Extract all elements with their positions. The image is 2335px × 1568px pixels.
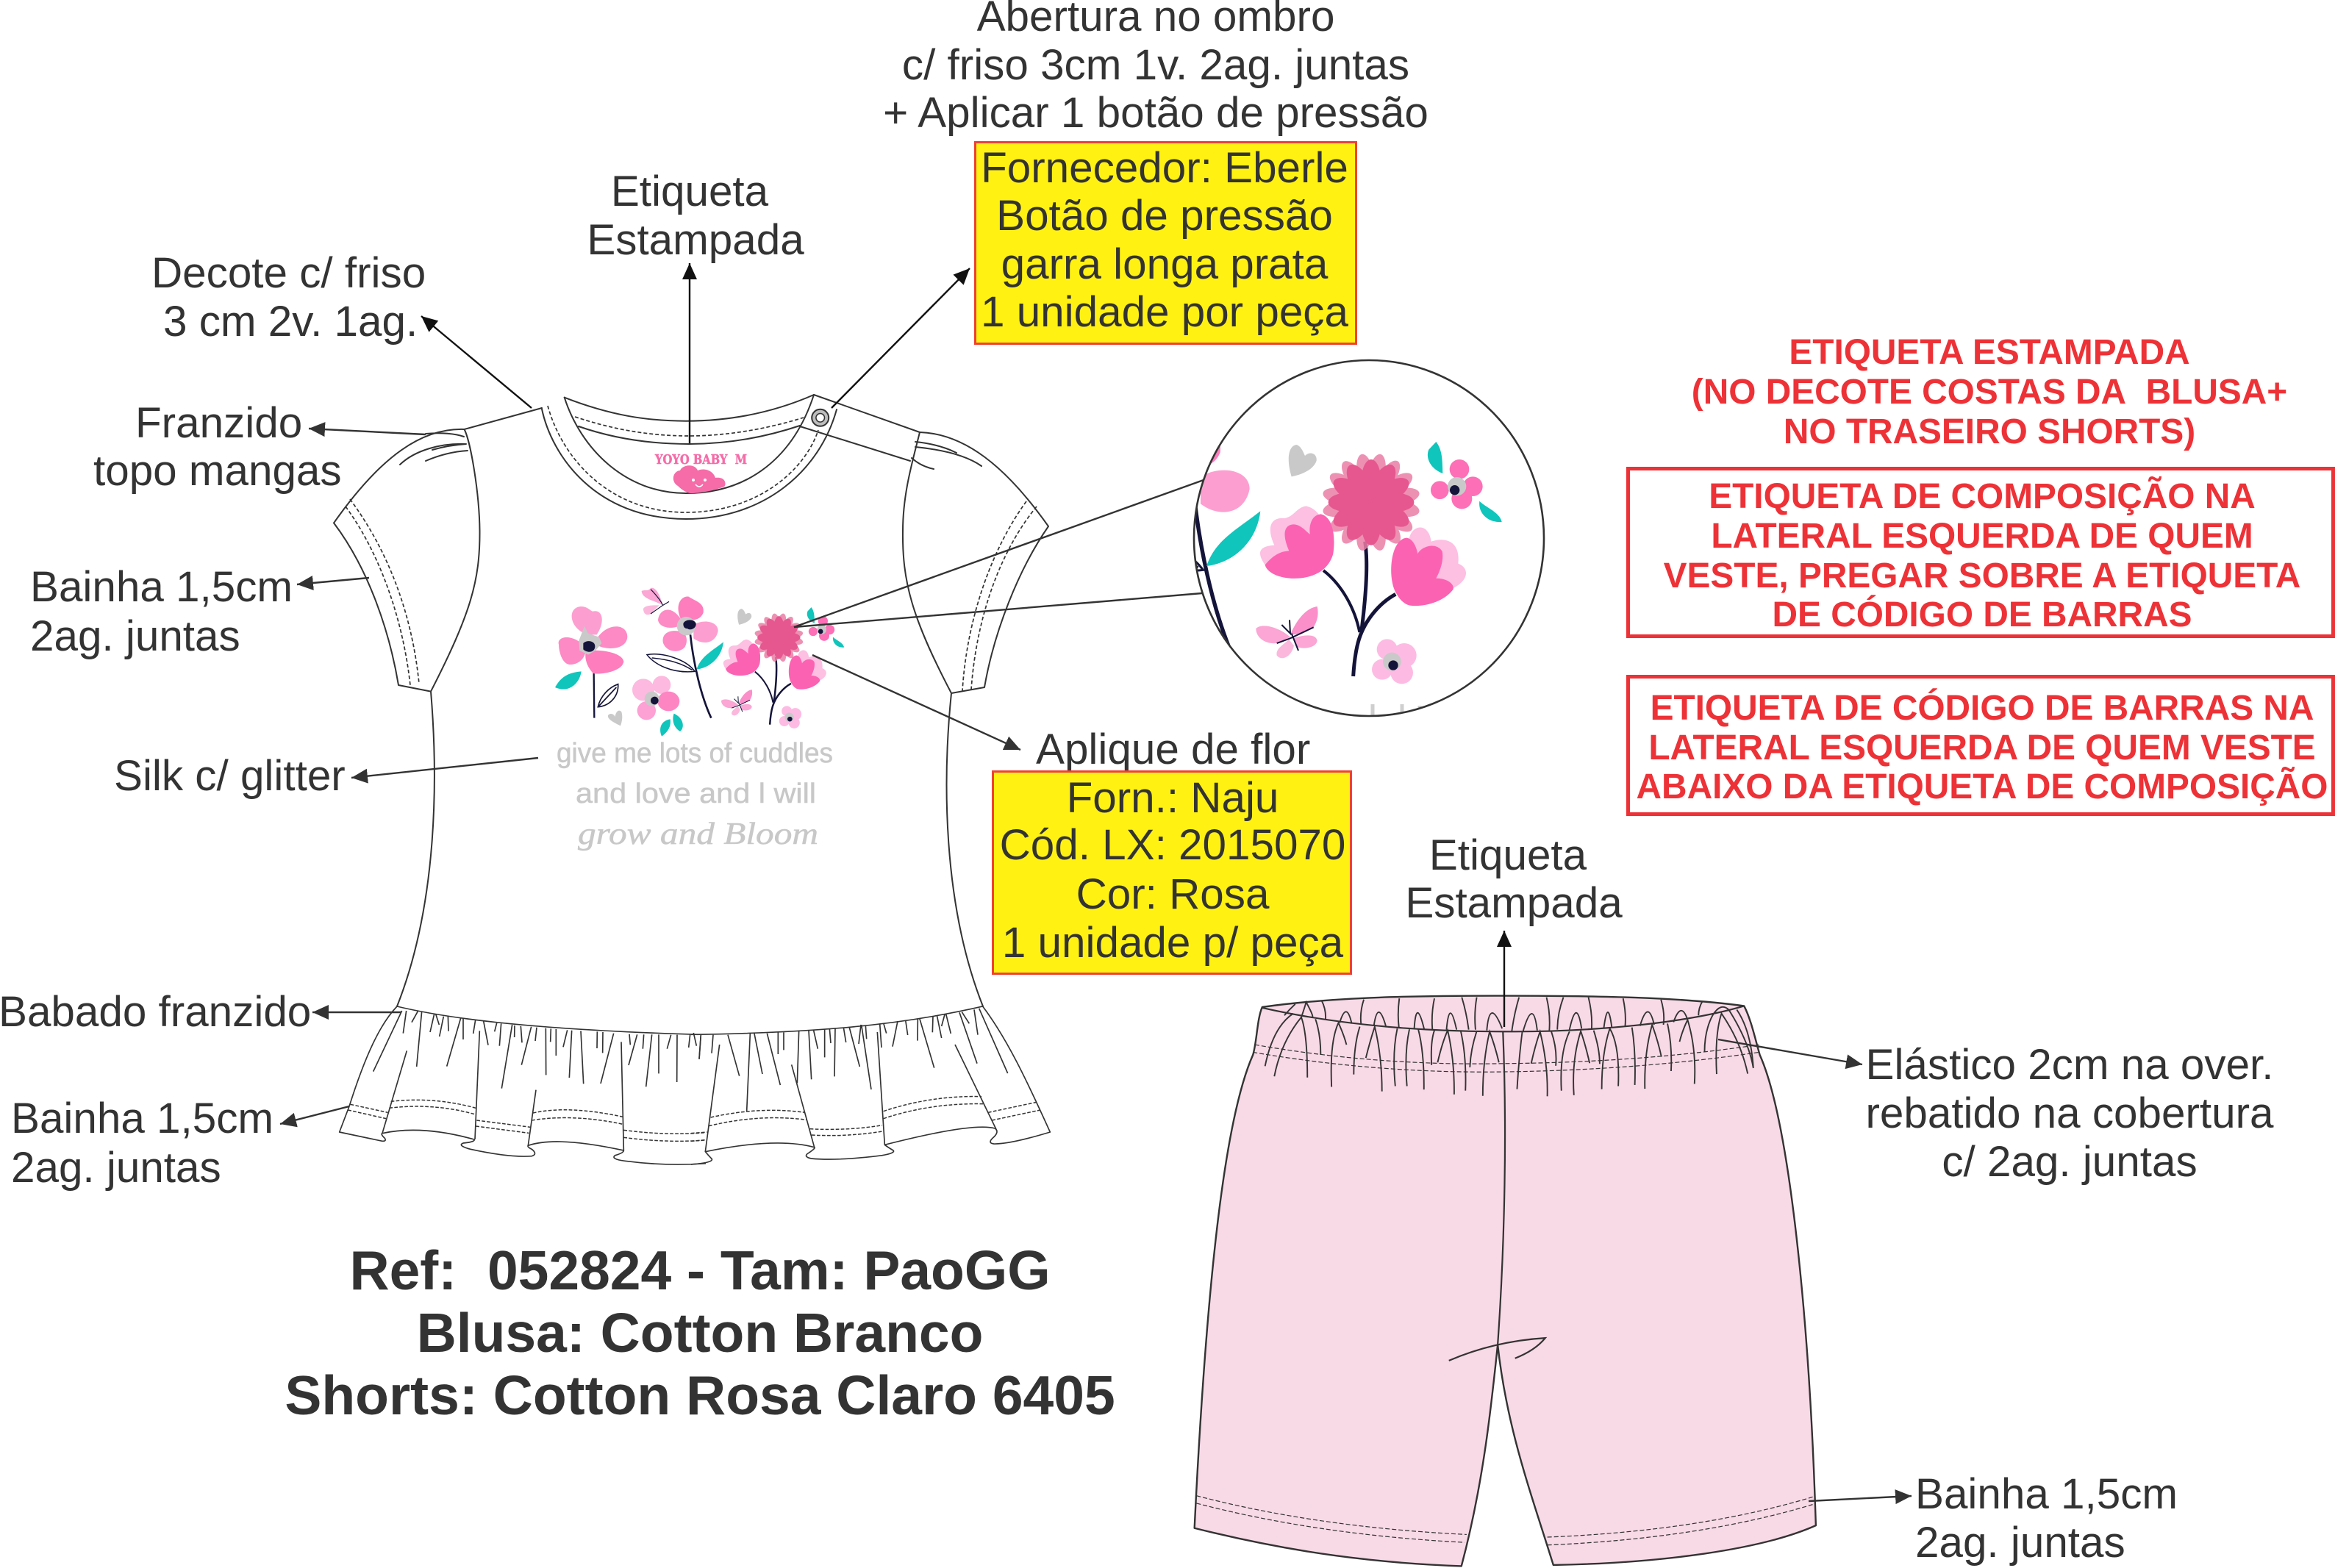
label: ruffle hem: Bainha 1,5cm xyxy=(11,1095,273,1142)
leader lines to detail circle xyxy=(794,480,1204,627)
label: shorts printed tag xyxy=(1405,831,1623,927)
label: sleeve gathers: Franzido xyxy=(135,399,302,447)
label: sleeve hem xyxy=(30,563,293,660)
shorts technical drawing xyxy=(1195,996,1816,1566)
small pale flower xyxy=(632,676,679,720)
red box: composition label: VESTE, PREGAR SOBRE A ETIQUETA xyxy=(1664,556,2300,595)
arrow: gathered sleeve top xyxy=(309,429,426,434)
label: printed neck tag: Etiqueta xyxy=(611,168,769,215)
label: shorts hem xyxy=(1915,1470,2178,1567)
teal leaves and gray hearts xyxy=(608,711,683,737)
callout: flower supplier: Forn.: Naju xyxy=(1067,774,1279,822)
callout: snap supplier: Fornecedor: Eberle xyxy=(981,144,1348,192)
waistband curve and center seam xyxy=(1262,1006,1744,1361)
arrow: shorts hem xyxy=(1809,1496,1912,1501)
label: flower applique: Aplique de flor xyxy=(1036,726,1310,773)
middle flower xyxy=(647,597,723,718)
red note: printed label placement: (NO DECOTE COSTAS DA BLUSA+ xyxy=(1692,373,2287,412)
label: printed neck tag: Estampada xyxy=(587,216,804,264)
callout: snap supplier: 1 unidade por peça xyxy=(981,288,1349,336)
label: shoulder opening: c/ friso 3cm 1v. 2ag. juntas xyxy=(902,41,1409,89)
red box: barcode label xyxy=(1628,676,2334,815)
label: shoulder opening xyxy=(883,0,1428,137)
callout: snap supplier: Botão de pressão xyxy=(996,192,1333,240)
zoom detail circle of flower xyxy=(1192,359,1545,717)
label: neckline: Decote c/ friso xyxy=(151,249,426,297)
printed neck label xyxy=(654,453,747,493)
title block: Shorts: Cotton Rosa Claro 6405 xyxy=(285,1364,1115,1426)
snap button xyxy=(812,409,829,426)
shorts waist and hem stitching xyxy=(1196,1045,1814,1545)
label: sleeve gathers xyxy=(93,399,342,495)
red box: barcode label: ABAIXO DA ETIQUETA DE COMPOSIÇÃO xyxy=(1637,766,2328,806)
callout: snap supplier: garra longa prata xyxy=(1001,240,1329,288)
label: ruffle hem: 2ag. juntas xyxy=(11,1144,221,1192)
red note: printed label placement xyxy=(1692,333,2287,451)
blouse body, sleeves and shoulders outline xyxy=(334,395,1048,1006)
red box: composition label xyxy=(1628,469,2334,637)
ruffle left half xyxy=(340,1006,706,1164)
red box: composition label: DE CÓDIGO DE BARRAS xyxy=(1773,594,2192,634)
hand lettered print text: give me lots of cuddles xyxy=(557,738,833,769)
elastic gathers xyxy=(1265,998,1753,1096)
printed neck label: YOYO BABY M xyxy=(654,453,747,468)
arrow: glitter print xyxy=(351,758,538,778)
label: shorts hem: 2ag. juntas xyxy=(1915,1519,2125,1567)
arrow: sleeve hem xyxy=(297,578,369,584)
chest flower print xyxy=(555,588,844,737)
label: shorts elastic: rebatido na cobertura xyxy=(1865,1089,2274,1137)
label: shorts elastic: c/ 2ag. juntas xyxy=(1942,1138,2198,1186)
label: shoulder opening: + Aplicar 1 botão de pressão xyxy=(883,89,1428,137)
label: ruffle: Babado franzido xyxy=(0,988,311,1036)
bouquet xyxy=(721,607,844,728)
arrow: ruffle xyxy=(312,1012,401,1013)
arrow: snap button xyxy=(832,268,970,408)
label: glitter print: Silk c/ glitter xyxy=(114,752,346,800)
label: neckline: 3 cm 2v. 1ag. xyxy=(163,298,418,346)
shorts silhouette xyxy=(1195,996,1816,1566)
sleeve hem stitching xyxy=(346,499,1037,691)
title block: Blusa: Cotton Branco xyxy=(417,1302,983,1364)
label: ruffle hem xyxy=(11,1095,273,1192)
callout: flower supplier: Cód. LX: 2015070 xyxy=(1000,821,1345,869)
label: neckline xyxy=(151,249,426,346)
red box: barcode label: LATERAL ESQUERDA DE QUEM VESTE xyxy=(1648,728,2316,767)
arrow: ruffle hem xyxy=(280,1106,349,1124)
arrow: neckline xyxy=(421,316,532,408)
red box: composition label: LATERAL ESQUERDA DE QUEM xyxy=(1711,517,2253,556)
arrow: flower applique xyxy=(812,655,1020,750)
red note: printed label placement: ETIQUETA ESTAMPADA xyxy=(1789,333,2190,372)
callout: snap supplier xyxy=(975,143,1356,344)
ruffle right half xyxy=(691,1006,1050,1164)
label: sleeve hem: Bainha 1,5cm xyxy=(30,563,293,611)
label: sleeve hem: 2ag. juntas xyxy=(30,612,240,660)
big flower left xyxy=(555,606,627,718)
red box: barcode label: ETIQUETA DE CÓDIGO DE BARRAS NA xyxy=(1651,687,2314,728)
blouse technical drawing xyxy=(334,395,1050,1164)
arrow: shorts printed label xyxy=(1503,931,1505,1027)
top butterfly xyxy=(642,588,669,615)
callout: flower supplier: 1 unidade p/ peça xyxy=(1002,919,1344,967)
callout: flower supplier xyxy=(993,772,1351,973)
label: printed neck tag xyxy=(587,168,804,264)
red note: printed label placement: NO TRASEIRO SHORTS) xyxy=(1784,412,2195,451)
hand lettered print text xyxy=(557,738,833,851)
label: sleeve gathers: topo mangas xyxy=(93,447,342,495)
label: shorts elastic: Elástico 2cm na over. xyxy=(1866,1041,2273,1089)
label: shorts elastic xyxy=(1865,1041,2274,1186)
hand lettered print text: and love and l will xyxy=(576,778,816,809)
label: shorts printed tag: Etiqueta xyxy=(1429,831,1587,879)
callout arrows xyxy=(280,263,1912,1501)
callout: flower supplier: Cor: Rosa xyxy=(1076,870,1270,918)
hand lettered print text: grow and Bloom xyxy=(578,817,818,851)
label: shorts printed tag: Estampada xyxy=(1405,879,1623,927)
title block: Ref: 052824 - Tam: PaoGG xyxy=(349,1239,1051,1301)
arrow: printed neck label xyxy=(689,263,690,443)
neckline collar with stitching xyxy=(542,395,837,519)
title block xyxy=(285,1239,1115,1426)
arrow: shorts elastic xyxy=(1718,1039,1862,1064)
label: shorts hem: Bainha 1,5cm xyxy=(1915,1470,2178,1518)
red box: composition label: ETIQUETA DE COMPOSIÇÃO NA xyxy=(1709,476,2256,516)
